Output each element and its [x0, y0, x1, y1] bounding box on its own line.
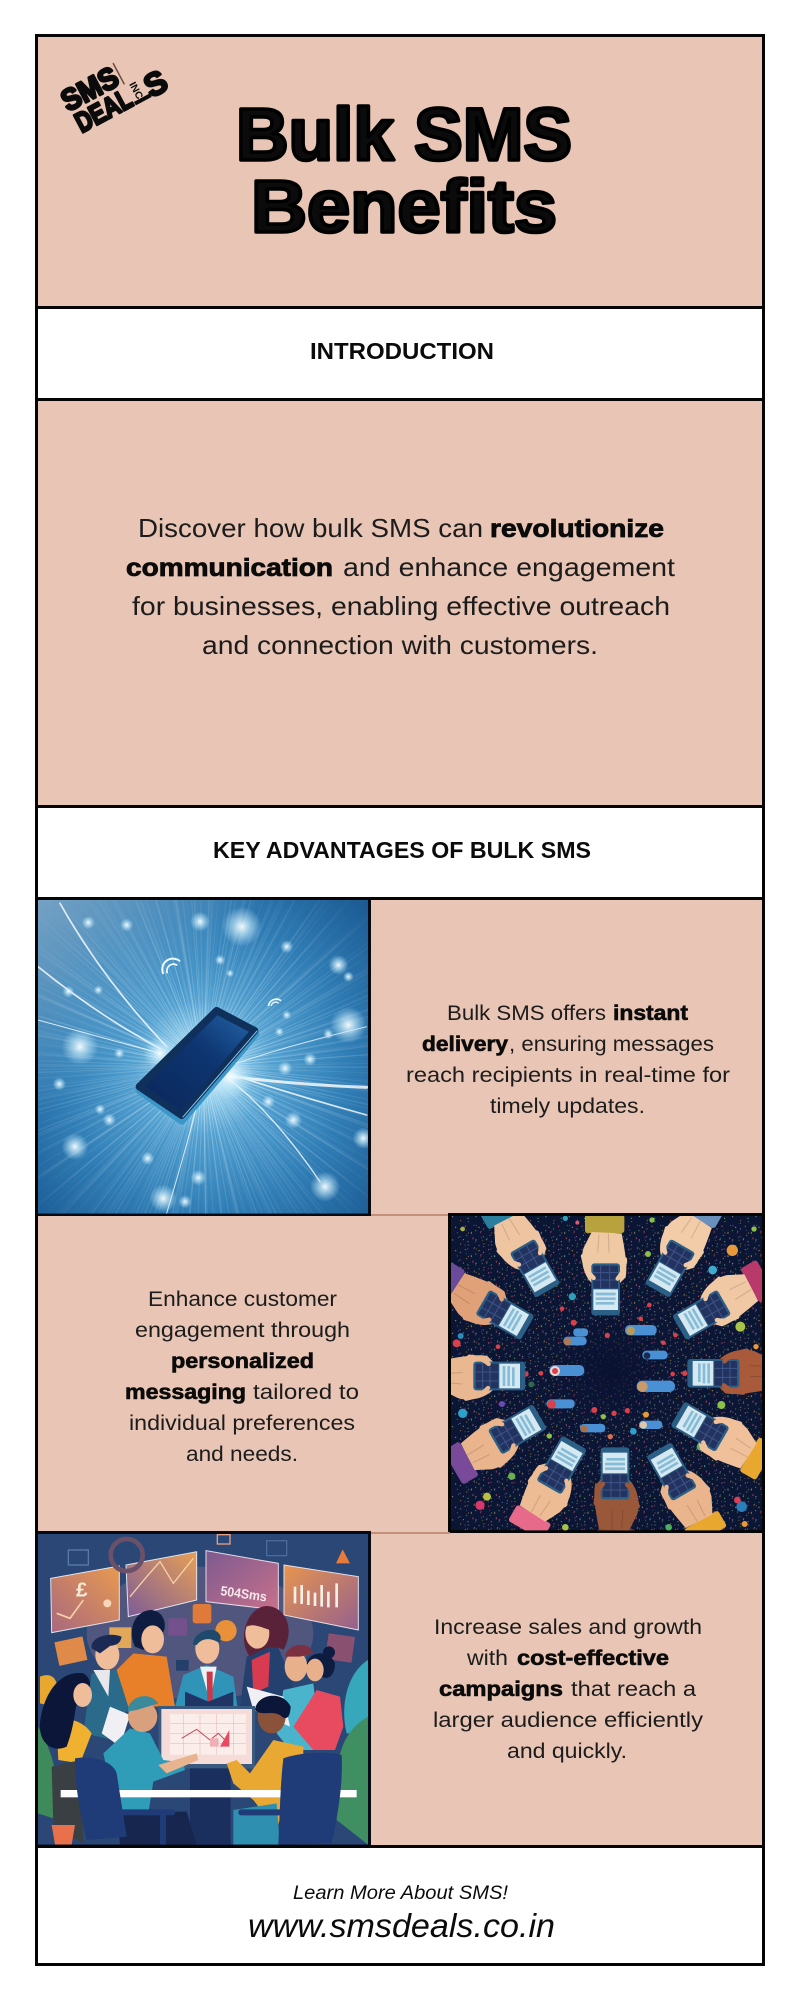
back row people [83, 1606, 343, 1750]
heading: key advantages [38, 808, 762, 897]
text: personalized messaging: messaging [125, 1381, 246, 1404]
panel: footer [38, 1848, 762, 1963]
text: cost-effective campaigns: with [466, 1647, 508, 1670]
analytics panels [51, 1551, 358, 1633]
front left woman [40, 1673, 130, 1845]
image: phone with light burst [38, 900, 371, 1216]
image: hands holding phones in a circle [448, 1213, 762, 1533]
phones and hands [451, 1216, 762, 1530]
panel: introduction text: communication [126, 554, 333, 582]
logo: SMS Deals Inc: INC [126, 80, 145, 101]
chat bubbles [547, 1325, 675, 1432]
text: cost-effective campaigns [433, 1616, 704, 1763]
text: instant delivery: Bulk SMS offers [447, 1002, 606, 1025]
text: personalized messaging: individual preferences [129, 1412, 355, 1435]
text: instant delivery [406, 1002, 730, 1118]
analytics panels: £ [76, 1579, 88, 1602]
text: instant delivery: reach recipients in real-time for [406, 1064, 730, 1087]
footer call to action: Learn More About SMS! [293, 1883, 509, 1904]
title [236, 93, 572, 248]
confetti dots [453, 1216, 759, 1531]
divider: row one and two [371, 1214, 450, 1216]
icon: smartphone [139, 1011, 257, 1121]
plants [38, 1660, 368, 1845]
text: personalized messaging: engagement through [135, 1319, 350, 1342]
floating icons [54, 1535, 355, 1671]
title: Benefits [251, 165, 557, 248]
title: Bulk SMS [236, 93, 572, 176]
text: instant delivery: , ensuring messages [509, 1033, 714, 1056]
text: cost-effective campaigns: campaigns [439, 1678, 563, 1701]
text: personalized messaging: personalized [171, 1350, 314, 1373]
text: cost-effective campaigns: and quickly. [507, 1740, 627, 1763]
text: cost-effective campaigns: Increase sales and growth [434, 1616, 702, 1639]
text: instant delivery: instant [613, 1002, 688, 1025]
divider: row two and three [371, 1532, 450, 1534]
text: cost-effective campaigns: that reach a [571, 1678, 696, 1701]
front yellow team member [227, 1696, 303, 1845]
logo: SMS Deals Inc: DEAL [70, 83, 137, 138]
text: instant delivery: timely updates. [490, 1095, 645, 1118]
logo: SMS Deals Inc: SMS [56, 61, 124, 118]
panel: advantages background [38, 900, 762, 1845]
panel: introduction text: and enhance engagement [343, 552, 676, 582]
image: team reviewing campaign analytics [35, 1531, 371, 1847]
text: personalized messaging: tailored to [253, 1381, 359, 1404]
logo: SMS Deals Inc [56, 41, 173, 142]
text: cost-effective campaigns: larger audience efficiently [433, 1709, 704, 1732]
panel: header [38, 37, 762, 306]
text: cost-effective campaigns: cost-effective [517, 1647, 669, 1670]
heading: key advantages: KEY ADVANTAGES OF BULK SMS [213, 837, 591, 863]
front teal presenter [103, 1696, 198, 1845]
panel: introduction text: Discover how bulk SMS can [138, 513, 483, 543]
chart monitor [158, 1706, 255, 1845]
panel: introduction text: for businesses, enabling effective outreach [132, 591, 670, 621]
icon: wifi signals [162, 959, 281, 1006]
panel: introduction text: and connection with customers. [202, 630, 598, 660]
logo: SMS Deals Inc: S [138, 63, 173, 104]
white table [61, 1790, 357, 1797]
chairs [75, 1753, 342, 1845]
panel: introduction text [38, 401, 762, 805]
heading: introduction [38, 309, 762, 398]
heading: introduction: INTRODUCTION [310, 338, 494, 364]
footer website: www.smsdeals.co.in [248, 1907, 555, 1944]
text: personalized messaging [125, 1288, 359, 1466]
text: personalized messaging: Enhance customer [148, 1288, 337, 1311]
text: instant delivery: delivery [422, 1033, 508, 1056]
text: personalized messaging: and needs. [186, 1443, 298, 1466]
panel: introduction text: revolutionize [490, 515, 664, 543]
analytics panels: 504Sms [220, 1583, 268, 1604]
